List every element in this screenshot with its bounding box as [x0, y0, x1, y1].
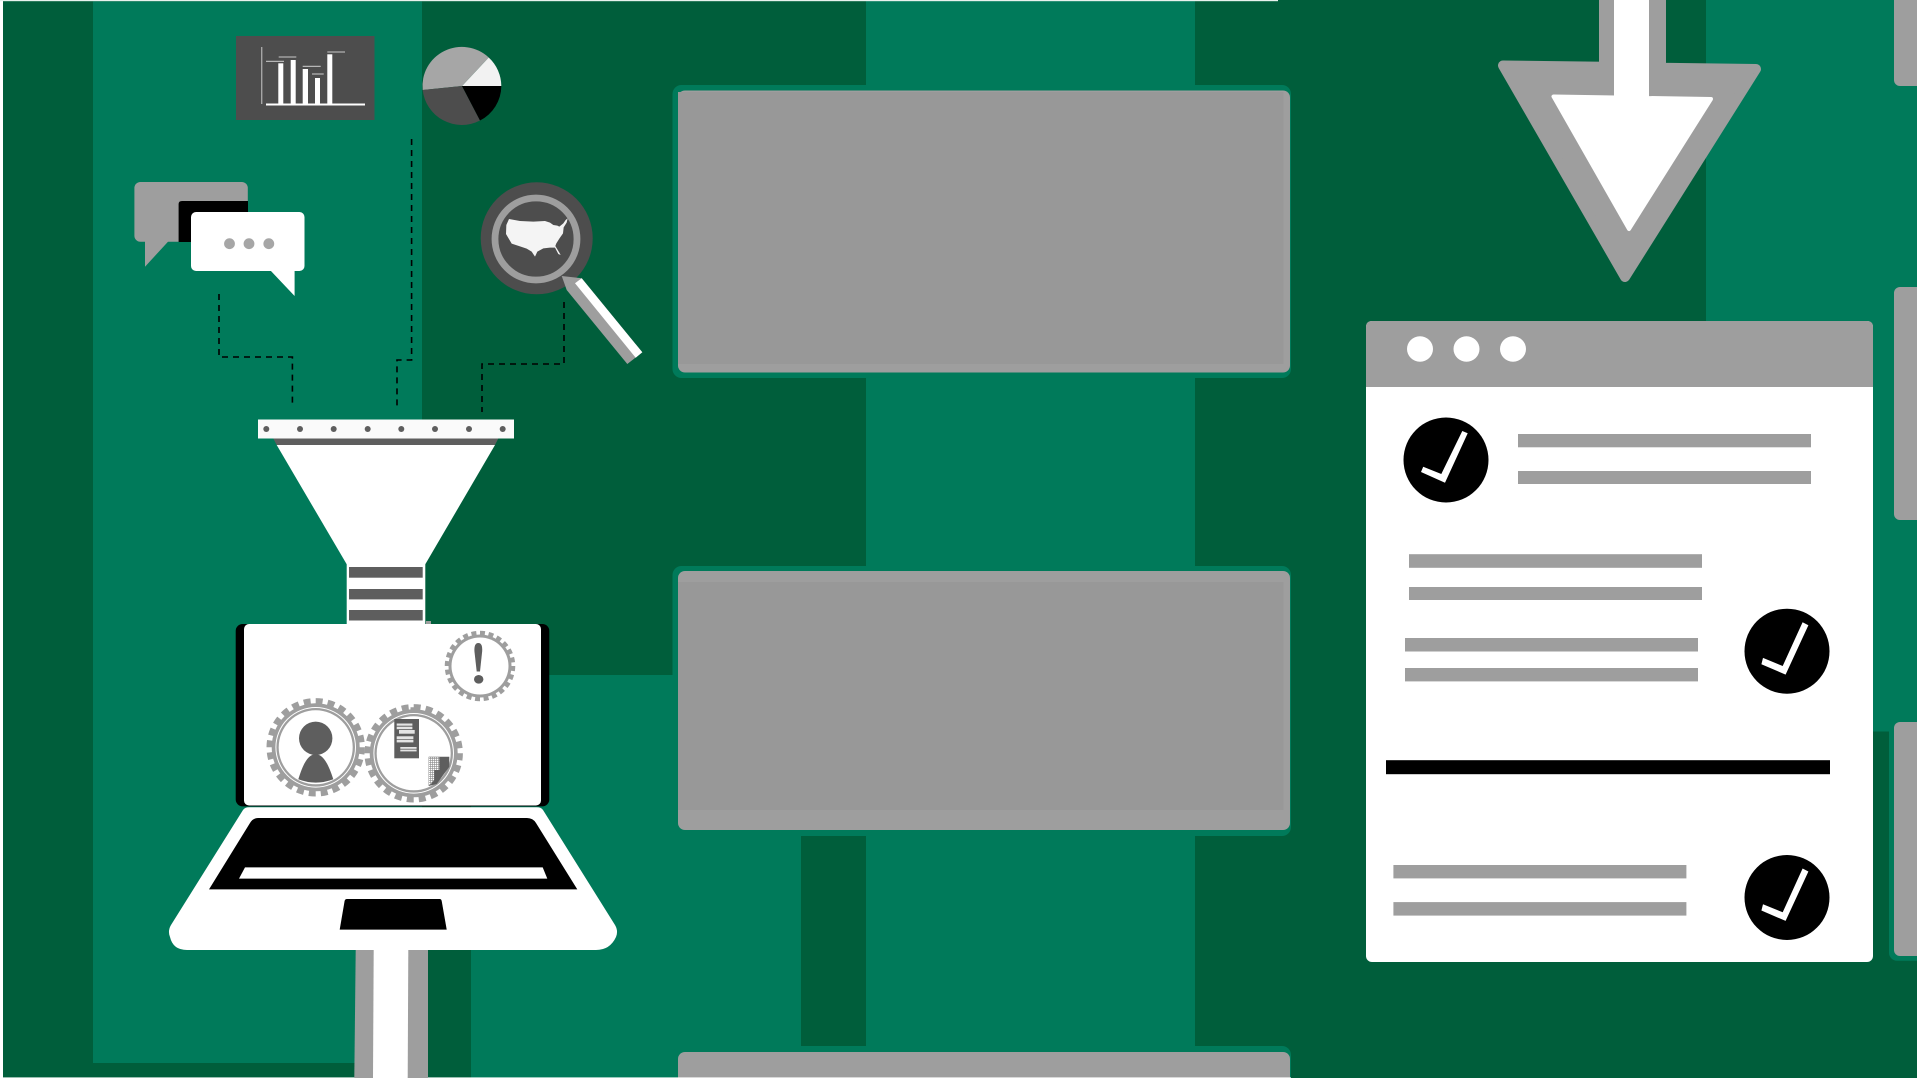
icon: pie chart	[422, 47, 501, 125]
panel: middle centre placeholder	[672, 566, 1291, 836]
laptop screen	[236, 624, 549, 806]
panel: right edge middle	[1894, 287, 1917, 520]
panel: right edge top	[1894, 0, 1917, 86]
panel: checklist window	[1366, 321, 1873, 962]
arrow: dashed connector from charts	[397, 139, 412, 407]
arrow: large down arrow	[1503, 0, 1756, 277]
icon: bar chart	[236, 36, 374, 120]
icon: gear with exclamation mark	[447, 633, 513, 699]
window title bar	[1366, 321, 1873, 387]
check item three	[1393, 855, 1830, 940]
icon: magnifier with US map	[481, 182, 642, 364]
icon: gear with person	[270, 701, 362, 793]
stem below laptop	[354, 950, 428, 1078]
laptop base with keyboard	[169, 807, 617, 950]
icon: speech bubbles	[134, 182, 304, 296]
text bars two	[1409, 554, 1702, 600]
panel: bottom centre placeholder	[0, 1046, 1291, 1078]
check item two	[1405, 609, 1830, 694]
map of the United States	[506, 218, 568, 257]
panel: top centre placeholder	[672, 85, 1291, 378]
panel: right edge bottom	[1889, 716, 1917, 961]
icon: gear with documents	[368, 707, 460, 799]
arrow: dashed connector from magnifier	[482, 302, 564, 412]
arrow: dashed connector from bubbles	[219, 294, 292, 405]
divider bar	[1386, 760, 1830, 774]
funnel	[258, 420, 514, 624]
check item one	[1404, 418, 1811, 502]
